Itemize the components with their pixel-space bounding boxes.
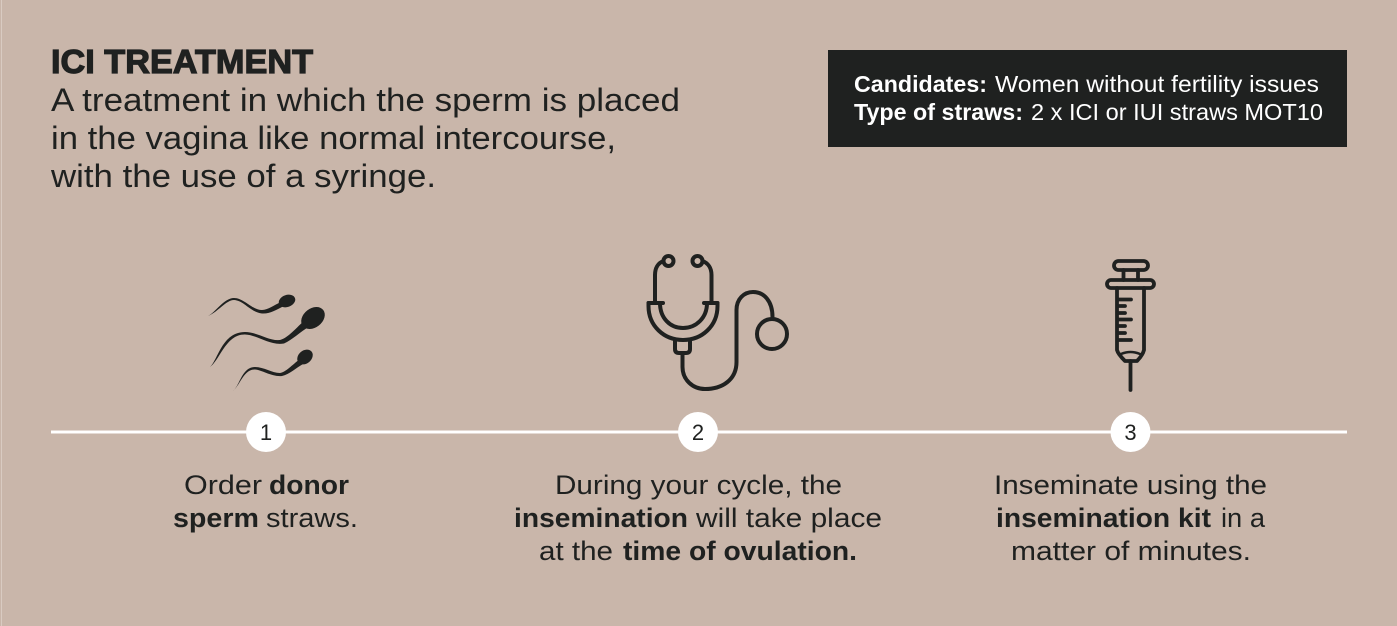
icon: stethoscope [648,256,787,389]
icon: syringe [1107,261,1154,390]
step 3 text: Inseminate using the [994,470,1267,500]
step marker 3: 3 [1124,420,1137,445]
callout: candidates and straws: Candidates: [854,71,987,97]
step marker 2: 2 [692,420,704,445]
description text: with the use of a syringe. [50,158,436,194]
icon: sperm [208,292,329,391]
step 2 text [514,470,882,566]
step marker 2 [678,412,718,452]
step 1 text: Order [184,470,262,500]
step 3 text: insemination kit [996,503,1211,533]
title: ICI TREATMENT [51,43,313,80]
step 2 text: at the [539,536,613,566]
step marker 3 [1110,412,1150,452]
step marker 1: 1 [260,420,272,445]
callout: candidates and straws [828,50,1347,147]
callout: candidates and straws: Women without fertility issues [995,71,1319,97]
description text [50,82,680,194]
step 3 text: in a [1221,503,1266,533]
step 1 text: straws. [266,503,358,533]
step 3 text: matter of minutes. [1011,536,1251,566]
step 1 text: sperm [173,503,259,533]
step 1 text [173,470,358,533]
callout: candidates and straws: Type of straws: [854,99,1023,125]
timeline [51,412,1347,452]
step 2 text: insemination [514,503,688,533]
description text: A treatment in which the sperm is placed [51,82,680,118]
step 2 text: will take place [695,503,882,533]
step 3 text [994,470,1267,566]
callout: candidates and straws: 2 x ICI or IUI straws MOT10 [1031,99,1323,125]
step 2 text: During your cycle, the [555,470,842,500]
step marker 1 [246,412,286,452]
description text: in the vagina like normal intercourse, [51,120,616,156]
step 2 text: time of ovulation. [623,536,857,566]
step 1 text: donor [269,470,350,500]
